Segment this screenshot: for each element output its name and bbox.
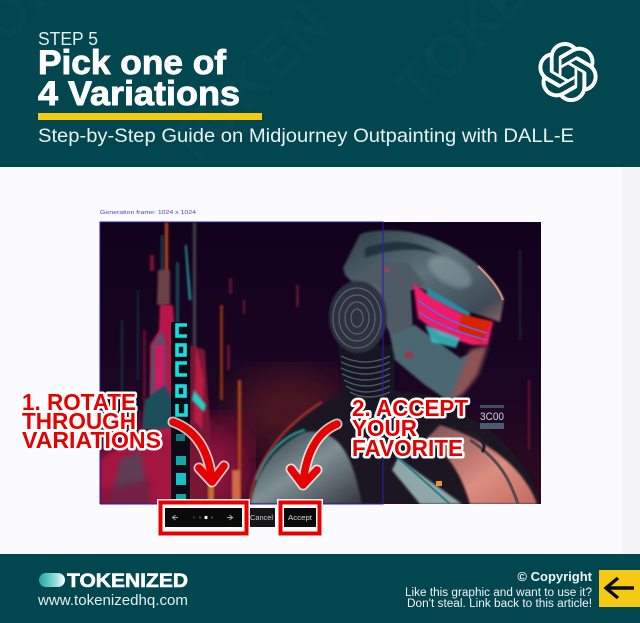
footer panel — [0, 554, 640, 623]
icon: yellow arrow box — [599, 570, 640, 607]
blue generation frame — [100, 222, 383, 504]
jaw — [388, 325, 478, 402]
title: Pick one of — [38, 44, 227, 82]
callout: accept your favorite: 2. ACCEPT — [352, 395, 468, 421]
header panel — [0, 0, 640, 179]
title — [38, 44, 240, 113]
title underline — [38, 113, 262, 120]
callout: accept your favorite: YOUR — [352, 415, 417, 441]
website: www.tokenizedhq.com — [37, 592, 188, 609]
callout: rotate through variations: THROUGH — [22, 408, 136, 434]
cancel button — [248, 508, 275, 527]
tower spires — [156, 222, 198, 348]
arrow: accept — [291, 424, 337, 485]
shoulder — [248, 385, 541, 504]
robot body — [248, 230, 541, 504]
pink tower — [150, 305, 178, 504]
callout: rotate through variations: 1. ROTATE — [22, 389, 136, 415]
copyright notice: Don't steal. Link back to this article! — [407, 598, 592, 610]
arrow: rotate — [173, 422, 224, 482]
small logo glyphs: 3C00 — [480, 411, 504, 423]
cyan sign — [171, 322, 190, 504]
callout: rotate through variations — [22, 389, 161, 453]
icon: Tokenized pill logo — [39, 573, 65, 587]
title: 4 Variations — [38, 75, 240, 113]
visor — [413, 283, 493, 345]
subtitle: Step-by-Step Guide on Midjourney Outpainting with DALL-E — [38, 125, 574, 147]
cyberpunk robot artwork — [80, 222, 541, 520]
red highlight: navigation — [160, 502, 247, 534]
red highlight: accept — [280, 502, 320, 534]
city glow — [80, 222, 530, 520]
right edge tint — [622, 167, 640, 554]
accept button — [284, 508, 316, 527]
right side streaks — [208, 480, 214, 504]
accept button: Accept — [288, 515, 312, 522]
cancel button: Cancel — [250, 515, 273, 522]
copyright notice — [405, 569, 593, 610]
small logo glyphs — [480, 405, 504, 429]
helmet — [343, 230, 504, 335]
icon: OpenAI logo — [538, 42, 598, 102]
brand name: TOKENIZED — [67, 571, 188, 592]
neck rings — [338, 345, 395, 410]
step label: STEP 5 — [38, 29, 98, 49]
copyright notice: © Copyright — [517, 569, 593, 584]
ear disc — [329, 281, 387, 353]
callout: accept your favorite: FAVORITE — [352, 435, 463, 461]
copyright notice: Like this graphic and want to use it? — [405, 587, 592, 599]
generation frame caption: Generation frame: 1024 x 1024 — [100, 210, 196, 216]
callout: accept your favorite — [352, 395, 468, 461]
callout: rotate through variations: VARIATIONS — [22, 427, 161, 453]
toolbar: navigation — [165, 508, 242, 527]
